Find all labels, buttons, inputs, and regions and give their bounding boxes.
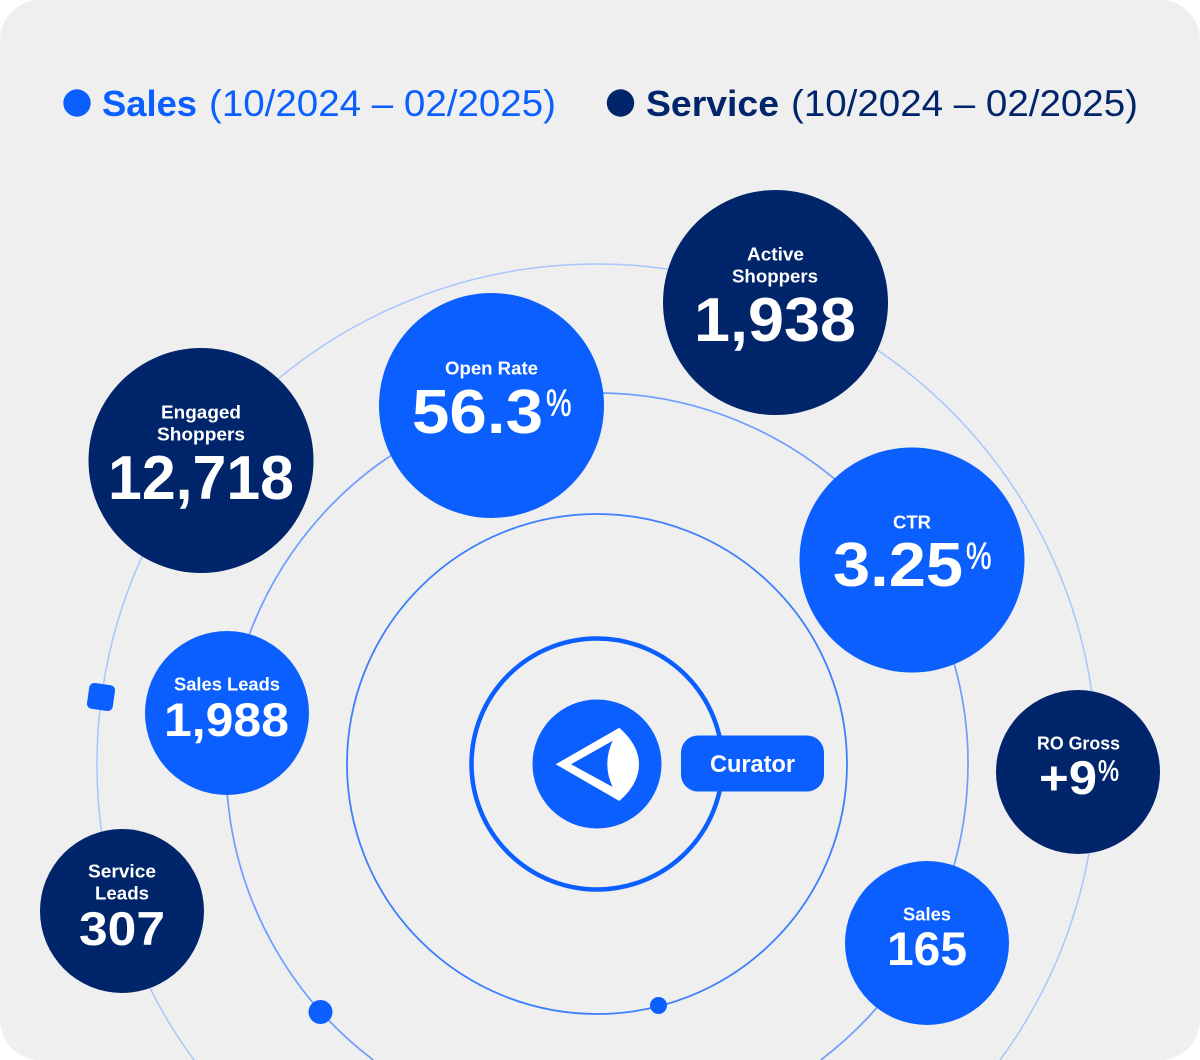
- bubble: ro gross: [996, 690, 1160, 854]
- bubble: service leads: [40, 829, 204, 993]
- legend: sales: [63, 83, 556, 124]
- icon: curator eye logo: [532, 700, 662, 828]
- bubble: open rate: 56.3: [412, 378, 543, 447]
- bubble: open rate: [379, 293, 604, 518]
- bubble: ctr: %: [966, 536, 992, 578]
- orbit marker: large dot: [308, 1000, 332, 1024]
- bubble: engaged shoppers: 12,718: [108, 444, 294, 513]
- bubble: sales leads: Sales Leads: [174, 674, 280, 694]
- bubble: ro gross: +9: [1039, 751, 1097, 804]
- legend: service: Service: [646, 83, 779, 124]
- bubble: ro gross: RO Gross: [1037, 734, 1120, 754]
- bubble: active shoppers: 1,938: [694, 286, 856, 355]
- bubble: engaged shoppers: Engaged: [161, 402, 241, 422]
- legend: service: [607, 83, 1138, 124]
- bubble: service leads: Service: [88, 862, 156, 882]
- bubble: sales leads: 1,988: [164, 693, 289, 746]
- bubble: open rate: %: [546, 382, 572, 424]
- bubble: ctr: [800, 448, 1024, 672]
- legend: sales: (10/2024 – 02/2025): [209, 83, 556, 124]
- bubble: sales: Sales: [903, 904, 951, 924]
- bubble: sales leads: [145, 631, 309, 795]
- bubble: ctr: 3.25: [833, 531, 963, 600]
- legend: sales: Sales: [102, 83, 197, 124]
- bubble: ctr: CTR: [893, 512, 931, 532]
- bubble: engaged shoppers: Shoppers: [157, 424, 245, 444]
- bubble: sales: [845, 861, 1009, 1025]
- orbit marker: small dot: [650, 997, 667, 1014]
- bubble: ro gross: %: [1098, 756, 1119, 788]
- curator label: Curator: [710, 751, 795, 778]
- bubble: active shoppers: Shoppers: [732, 266, 818, 286]
- orbit marker: square: [86, 682, 116, 712]
- bubble: service leads: 307: [79, 902, 165, 955]
- bubble: open rate: Open Rate: [445, 358, 538, 378]
- legend: service: (10/2024 – 02/2025): [791, 83, 1138, 124]
- curator label: [681, 736, 824, 792]
- bubble: sales: 165: [887, 922, 967, 975]
- orbit rings: [97, 264, 1097, 1060]
- bubble: active shoppers: [663, 190, 888, 415]
- bubble: engaged shoppers: [88, 348, 314, 573]
- bubble: active shoppers: Active: [747, 244, 804, 264]
- bubble: service leads: Leads: [95, 884, 149, 904]
